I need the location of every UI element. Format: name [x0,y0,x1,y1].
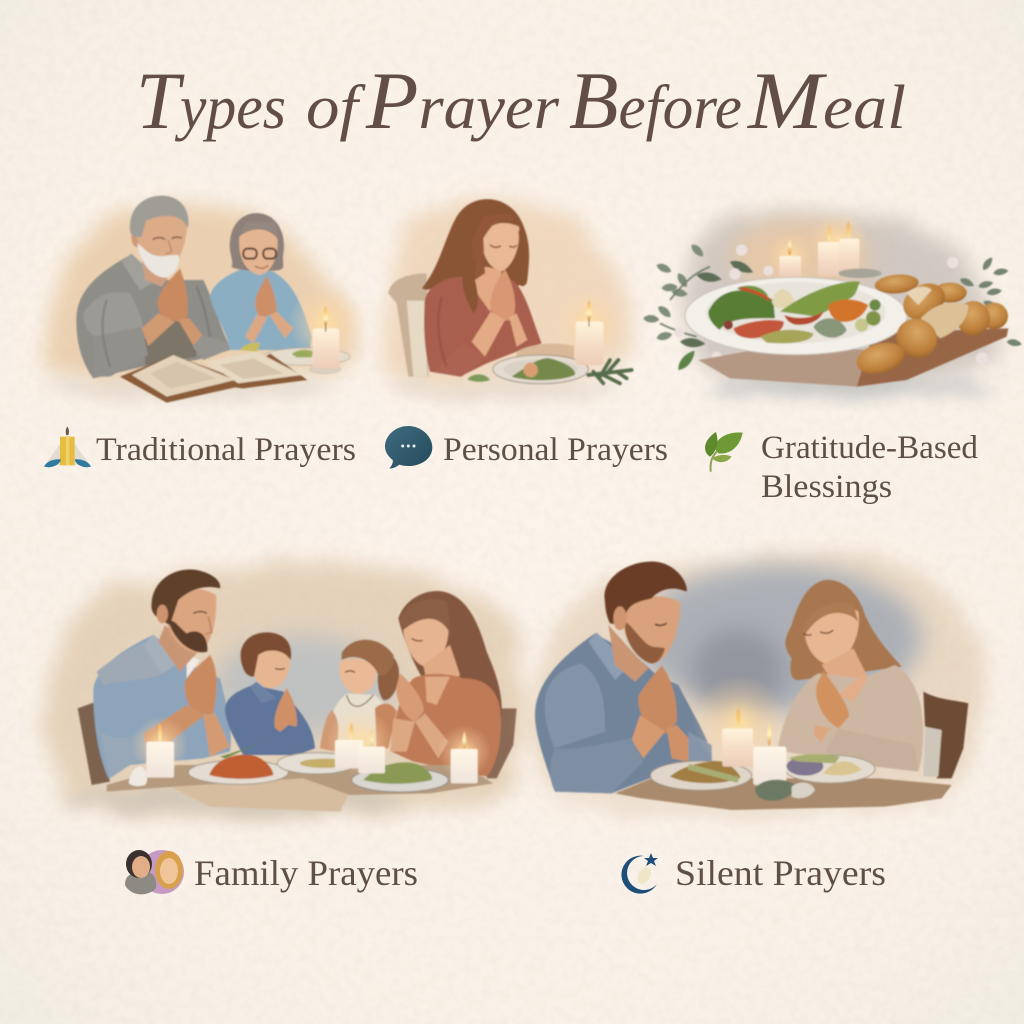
table wash [40,376,340,401]
mother portrait [125,850,156,894]
label: family prayers: Family Prayers [194,853,418,893]
sage garnish [755,780,815,801]
blue-grey wash [635,565,922,712]
bread loaves [853,273,1008,379]
plate [685,277,907,355]
wooden board [857,328,1008,387]
candles [722,708,786,785]
table shadow wash [63,788,410,812]
man [76,196,230,378]
couple scene [535,562,968,810]
herb sprig [588,360,632,383]
left chair [78,703,110,785]
mother [390,591,502,777]
title: Prayer [365,55,560,146]
label: personal prayers: Personal Prayers [443,432,668,468]
panel: family prayers illustration [48,562,524,817]
blue shadow under table [710,376,997,397]
watercolor wash [687,210,1003,387]
watercolor wash [48,562,524,817]
candle [554,288,624,365]
table runner [167,778,350,812]
icon: two family portraits [125,850,184,894]
table surface [615,778,952,810]
hair back [422,199,529,313]
panel: personal prayers illustration [380,199,633,400]
title [136,55,906,146]
plates [650,754,875,790]
icon: praying hands with candle [44,427,91,467]
girl [320,640,399,752]
panel: traditional prayers illustration [40,196,362,403]
open book [120,352,307,403]
plate and candle [263,287,362,374]
figure and table [388,199,632,384]
panel: silent prayers illustration [532,554,982,814]
dark centre wash [692,628,785,715]
panel: gratitude-based blessings illustration [643,210,1022,397]
plates of food [188,742,448,792]
label: gratitude-based blessings [761,430,978,505]
table cloth under plate [698,347,873,387]
icon: green leaf sprig [705,432,743,472]
watercolor wash [49,203,358,383]
left greenery [643,242,755,373]
boy [225,632,315,755]
blue-grey centre wash [213,635,393,735]
daughter portrait [155,851,183,889]
label: gratitude-based blessings: Gratitude-Based [761,430,978,466]
woman with glasses [210,213,312,352]
right chair [487,708,517,778]
watercolor wash [532,554,982,808]
plate with salad [493,344,588,384]
chair [388,273,428,377]
white blossoms [674,244,988,364]
man [535,562,712,793]
title: of [306,74,366,142]
candles [129,708,491,786]
right chair [923,692,968,778]
candles [767,212,882,278]
title: Meal [747,55,906,146]
title: Types [136,55,286,146]
woman [424,213,542,377]
figures and table [76,196,362,403]
right greenery [959,255,1022,347]
food scene [643,212,1022,387]
label: silent prayers: Silent Prayers [675,853,886,893]
label: traditional prayers: Traditional Prayers [96,432,356,468]
pink backing circle [140,850,184,894]
icon: speech bubble [385,426,432,469]
salad [708,282,881,343]
glow behind candles [693,675,787,768]
father [93,570,231,778]
family scene [78,570,517,812]
table wash [545,793,958,814]
table wash [380,380,627,400]
icon: crescent moon and star [621,853,658,894]
woman [778,580,923,772]
warm candle wash [730,220,870,293]
leaf garnish [467,374,490,382]
title: Before [569,55,742,146]
label: gratitude-based blessings: Blessings [761,469,892,505]
watercolor wash [386,200,633,388]
table surface [107,765,493,795]
